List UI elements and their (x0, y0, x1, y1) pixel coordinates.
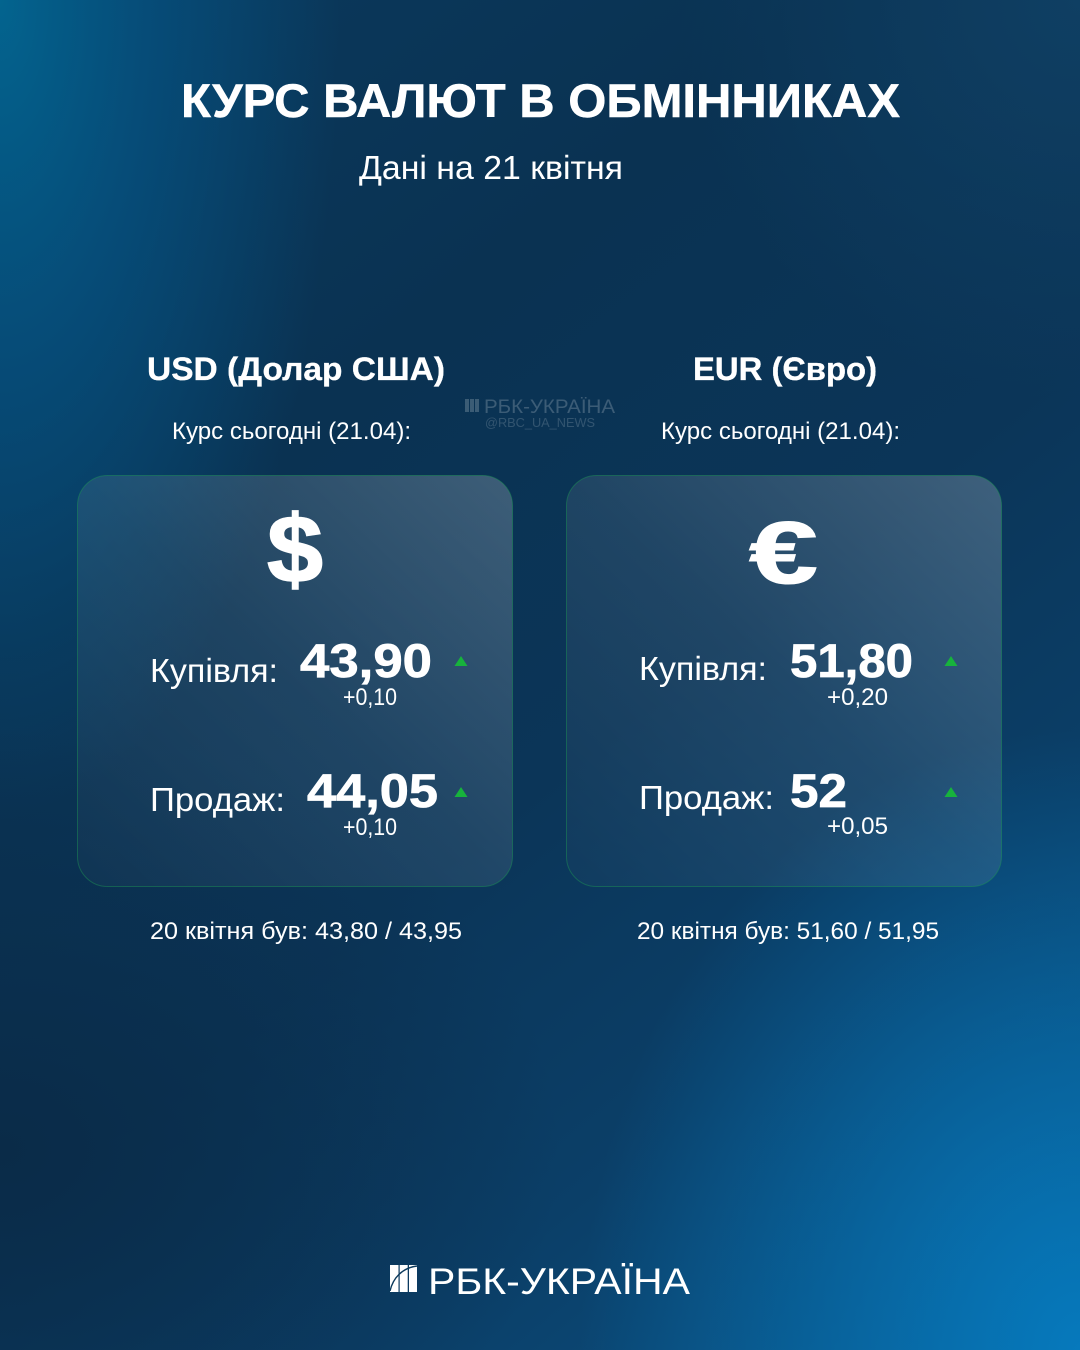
value: buy: 51,80 (790, 634, 913, 687)
note: EUR previous rate: 20 квітня був: 51,60 / 51,95 (637, 918, 939, 945)
watermark handle: @RBC_UA_NEWS (485, 415, 595, 430)
label: buy: Купівля: (639, 650, 767, 687)
heading: USD: USD (Долар США) (147, 351, 445, 387)
brand name: РБК-УКРАЇНА (428, 1261, 690, 1302)
panel: USD card (78, 476, 512, 886)
label: sell: Продаж: (150, 781, 285, 818)
footer logo (390, 1261, 690, 1302)
card background (566, 476, 1002, 886)
panel: EUR card (566, 476, 1002, 886)
label: USD rate today: Курс сьогодні (21.04): (172, 418, 411, 445)
value: buy: 43,90 (300, 634, 432, 687)
change: buy: +0,10 (343, 684, 397, 711)
change: sell: +0,10 (343, 814, 397, 841)
change: sell: +0,05 (827, 813, 888, 840)
watermark brand name: РБК-УКРАЇНА (484, 397, 615, 418)
icon: euro sign: € (749, 503, 818, 602)
icon: watermark logo (465, 399, 479, 412)
watermark (465, 397, 615, 430)
title: КУРС ВАЛЮТ В ОБМІННИКАХ (181, 74, 900, 127)
note: USD previous rate: 20 квітня був: 43,80 / 43,95 (150, 918, 462, 945)
icon: up arrow buy (944, 656, 958, 666)
heading: EUR: EUR (Євро) (693, 351, 877, 387)
value: sell: 44,05 (307, 764, 438, 817)
icon: dollar sign: $ (267, 496, 323, 603)
label: buy: Купівля: (150, 652, 278, 689)
label: sell: Продаж: (639, 779, 774, 816)
card background (78, 476, 512, 886)
icon: up arrow sell (944, 787, 958, 797)
change: buy: +0,20 (827, 684, 888, 711)
icon: up arrow buy (454, 656, 468, 666)
value: sell: 52 (790, 764, 847, 817)
label: EUR rate today: Курс сьогодні (21.04): (661, 418, 900, 445)
icon: RBC mark (390, 1265, 417, 1292)
icon: up arrow sell (454, 787, 468, 797)
subtitle: Дані на 21 квітня (359, 149, 623, 186)
